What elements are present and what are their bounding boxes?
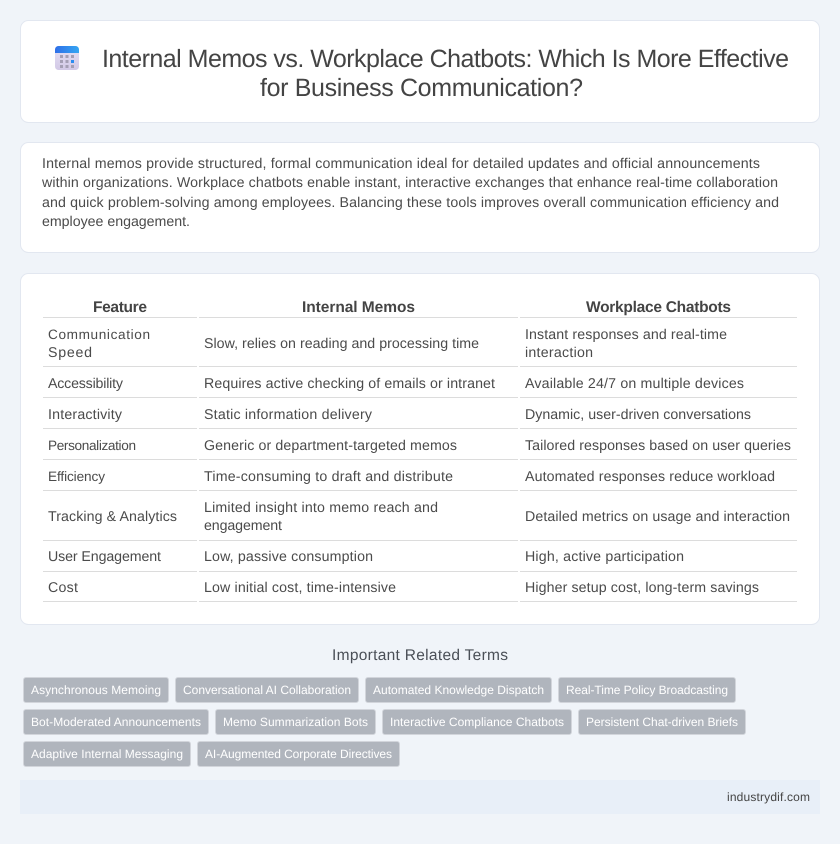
row: personalization	[48, 438, 791, 454]
row: accessibility: Accessibility	[48, 376, 124, 392]
row: cost: Cost	[48, 580, 78, 596]
row: efficiency	[48, 469, 775, 485]
related terms tags: Asynchronous Memoing	[31, 683, 161, 697]
footer bar: industrydif.com	[727, 790, 810, 804]
row: efficiency: Automated responses reduce workload	[525, 469, 775, 485]
intro paragraph: Internal memos provide structured, formal communication ideal for detailed updates and official announcements	[42, 156, 760, 172]
intro text panel	[20, 142, 820, 252]
related terms tags: Adaptive Internal Messaging	[31, 747, 183, 761]
row: tracking and analytics: Detailed metrics on usage and interaction	[525, 509, 790, 525]
row: personalization: Personalization	[48, 438, 136, 453]
table header	[93, 299, 731, 316]
related terms tags: Automated Knowledge Dispatch	[373, 683, 544, 697]
row: tracking and analytics: Limited insight into memo reach and	[204, 500, 438, 516]
row: tracking and analytics: engagement	[204, 518, 282, 534]
table header: Workplace Chatbots	[586, 299, 731, 316]
row: tracking and analytics: Tracking & Analytics	[48, 509, 177, 525]
row: personalization: Generic or department-targeted memos	[204, 438, 457, 454]
row: cost: Low initial cost, time-intensive	[204, 580, 396, 596]
row: communication speed	[48, 327, 727, 361]
related terms tags: Persistent Chat-driven Briefs	[586, 715, 738, 729]
intro paragraph: employee engagement.	[42, 214, 190, 230]
row: accessibility	[48, 376, 744, 392]
related terms tags: Memo Summarization Bots	[223, 715, 368, 729]
title	[102, 45, 789, 102]
related terms tags	[24, 678, 746, 766]
row: user engagement	[48, 549, 684, 565]
row: communication speed: Communication	[48, 327, 150, 342]
related terms tags: AI-Augmented Corporate Directives	[205, 747, 392, 761]
row: interactivity: Static information delivery	[204, 407, 373, 423]
comparison table panel	[20, 274, 820, 624]
row: user engagement: User Engagement	[48, 549, 161, 565]
row: user engagement: Low, passive consumption	[204, 549, 373, 565]
footer bar	[20, 780, 820, 814]
header panel	[20, 20, 820, 122]
row: efficiency: Efficiency	[48, 469, 105, 484]
table header: Feature	[93, 299, 147, 316]
intro paragraph: and quick problem-solving among employees. Balancing these tools improves overall communication efficiency and	[42, 195, 779, 211]
row: interactivity: Dynamic, user-driven conversations	[525, 407, 751, 423]
row: interactivity	[48, 407, 751, 423]
row: tracking and analytics	[48, 500, 790, 534]
related terms tags: Real-Time Policy Broadcasting	[566, 683, 728, 697]
row: user engagement: High, active participation	[525, 549, 684, 565]
row: communication speed: Instant responses and real-time	[525, 327, 727, 343]
title: for Business Communication?	[260, 74, 583, 102]
row: communication speed: Speed	[48, 345, 92, 361]
title: Internal Memos vs. Workplace Chatbots: Which Is More Effective	[102, 45, 789, 73]
row: efficiency: Time-consuming to draft and distribute	[204, 469, 453, 485]
row: personalization: Tailored responses based on user queries	[525, 438, 791, 454]
row: communication speed: interaction	[525, 345, 593, 361]
intro paragraph	[41, 156, 779, 230]
row: cost: Higher setup cost, long-term savings	[525, 580, 759, 596]
row: accessibility: Requires active checking of emails or intranet	[204, 376, 495, 392]
row: interactivity: Interactivity	[48, 407, 123, 423]
related terms tags: Interactive Compliance Chatbots	[390, 715, 564, 729]
icon: calendar	[55, 46, 79, 70]
related terms tags: Bot-Moderated Announcements	[31, 715, 201, 729]
row: cost	[48, 580, 759, 596]
row: communication speed: Slow, relies on reading and processing time	[204, 336, 479, 352]
intro paragraph: within organizations. Workplace chatbots enable instant, interactive exchanges that enhance real-time collaboration	[41, 175, 778, 191]
related terms tags: Conversational AI Collaboration	[183, 683, 351, 697]
row: accessibility: Available 24/7 on multiple devices	[525, 376, 744, 392]
table header: Internal Memos	[302, 299, 415, 316]
related terms heading: Important Related Terms	[332, 647, 508, 664]
